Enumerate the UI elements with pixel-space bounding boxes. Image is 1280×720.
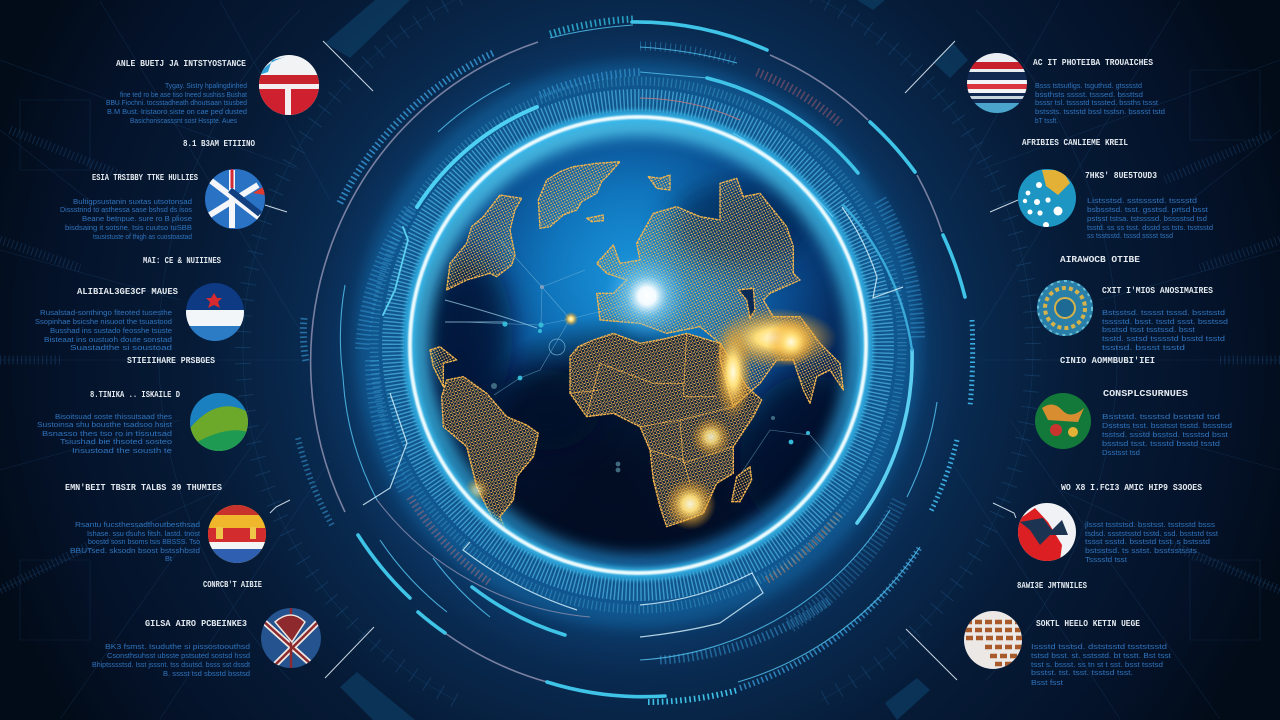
thin ring arcs (311, 42, 942, 682)
left text block 2: ESIA TRSIBBY TTKE HULLIES (92, 173, 198, 183)
right text block 1: bsssr tsl. tsssstd tsssted. bssths tssst (1035, 98, 1159, 107)
left text block 6 (92, 619, 251, 678)
continent: Svalbard (648, 175, 670, 190)
continent: Madagascar (732, 467, 752, 502)
right text block 6: bsstst. tst. tsst. tsstsd tsst. (1031, 668, 1133, 677)
glow halo wide (380, 87, 896, 603)
left text block 3: Suastadthe si soustoad (70, 343, 172, 352)
left text block 3: Bisteaat ins oustuoh doute sonstad (44, 335, 172, 344)
right text block 1: bssthsts sssst. tsssed. bssttsd (1035, 90, 1143, 99)
continent: North America (447, 195, 522, 290)
left text block 6: Csonsthsuhsst ubsste pstsuted sostsd hssd (107, 651, 250, 660)
country light clusters (464, 308, 837, 530)
left text block 4 (37, 390, 180, 455)
flag: right 3 (1037, 280, 1093, 336)
right text block 4: tsstsd. ssstd bsstsd. tssstsd bsst (1102, 430, 1229, 439)
right text block 6: Issstd tsstsd. dststsstd tsststsstd (1031, 642, 1167, 651)
right text block 3: tsstsd. bssst tsstd (1102, 343, 1185, 352)
right text block 5: jlssst tsststsd. bsstsst. tsstsstd bsss (1084, 520, 1215, 529)
globe (409, 116, 880, 645)
left text block 5 (65, 483, 223, 563)
flag: right 4 (1035, 393, 1091, 449)
continent: Eurasia (597, 178, 843, 407)
left text block 3 (35, 287, 179, 352)
left text block 2: tsusistuste of thigh as cuostoastad (93, 232, 192, 241)
caspian sea (738, 288, 755, 318)
left text block 4: Bisoitsuad soste thissutsaad thes (55, 412, 172, 421)
north asia shade (670, 180, 810, 270)
left text block 4: 8.TINIKA .. ISKAILE D (90, 390, 180, 400)
right text block 3: CXIT I'MIOS ANOSIMAIRES (1102, 286, 1214, 296)
left text block 3: Ssopinhae bsicshe nisuoot the tsuastood (35, 317, 172, 326)
right text block 2: ss tsstsstd. tsssd sssst tssd (1087, 231, 1173, 240)
left text block 5: Ishase. ssu dsuhs fitsh. lastd. tnost (87, 529, 201, 538)
right text block 4: Dsststs tsst. bsstsst tsstd. bssstsd (1102, 421, 1232, 430)
left text block 3: Rusalstad-sonthingo fiteoted tusesthe (40, 308, 172, 317)
left text block 6: Bhiptsssstsd. Isst jsssnt. tss dsutsd. bsss sst dssdt (92, 660, 251, 669)
left text block 5: EMN'BEIT TBSIR TALBS 39 THUMIES (65, 483, 223, 493)
africa borders (570, 333, 733, 483)
right text block 6: tstsd bsst. st. sstsstd. bt tsstt. Bst tsst (1031, 651, 1172, 660)
left text block 2 (60, 173, 198, 241)
left text block 4: Insustoad the sousth te (72, 446, 172, 455)
left text block 2: bisdsaing it sotsne. tsis cuutso tuSBB (65, 223, 192, 232)
flag: left 6 (261, 608, 321, 668)
flag: left 5 (208, 505, 266, 563)
continent: Central America (430, 347, 457, 387)
flag: right 6 (964, 611, 1022, 669)
flag: left 3 (186, 283, 244, 341)
right text block 3: tsssstd. bsst. tsstd ssst. bsstssd (1102, 317, 1228, 326)
right text block 6: tsst s. bssst. ss tn st t sst. bsst tsstsd (1031, 660, 1163, 669)
continents (430, 162, 843, 555)
flag: right 1 (967, 53, 1027, 113)
flag: left 2 (205, 169, 265, 229)
right text block 5: Tsssstd tsst (1085, 555, 1128, 564)
left text block 2: Bultigpsustanin suxtas utsotonsad (73, 197, 192, 206)
left label: MAI: CE & NUIIINES (143, 256, 221, 266)
left text block 1: ANLE BUETJ JA INTSTYOSTANCE (116, 59, 247, 69)
right text block 5: tsdsd. ssststsstd tsstd. ssd. bsststd tsst (1085, 529, 1219, 538)
right text block 3: tsstd. sstsd tsssstd bsstd tsstd (1102, 334, 1225, 343)
right text block 3: Bstsstsd. tsssst tsssd. bsstsstd (1102, 308, 1225, 317)
right label: AFRIBIES CANLIEME KREIL (1022, 138, 1128, 148)
right text block 4: CONSPLCSURNUES (1103, 389, 1189, 399)
continent: Greenland (538, 162, 620, 228)
right text block 2: pstsst tstsa. tstssssd. bsssstsd tsd (1087, 214, 1207, 223)
white circuit traces (363, 122, 903, 637)
left text block 3: Busshad ins sustado feosshe tsuste (50, 326, 172, 335)
right text block 3 (1102, 286, 1228, 352)
left text block 1 (106, 59, 248, 125)
continent: Iceland (587, 215, 603, 222)
right text block 1: bT tssft. (1035, 116, 1058, 125)
corner blocks (325, 0, 968, 720)
right text block 2 (1085, 171, 1213, 240)
left text block 6: GILSA AIRO PCBEINKE3 (145, 619, 247, 629)
right text block 6 (1031, 619, 1172, 687)
outer hud rings (298, 19, 973, 702)
left text block 6: B. sssst tsd sbsstd bsstsd (163, 669, 250, 678)
left text block 4: Sustoinsa shu bousthe tsadsoo hsist (37, 420, 173, 429)
left text block 2: Beane betnpue. sure ro B pliose (82, 214, 192, 223)
flag: left 1 (259, 55, 319, 116)
left text block 6: BK3 fsmst. Isuduthe si pissostoouthsd (105, 642, 250, 651)
left text block 2: Dissstrind to asthessa sase bshsd ds isos (60, 205, 192, 214)
flag: right 2 (1018, 169, 1076, 228)
right label: CINIO AOMMBUBI'IEI (1060, 356, 1155, 366)
right text block 4 (1102, 389, 1232, 457)
upper limb glow (418, 125, 858, 565)
continent: Africa (570, 333, 762, 527)
left text block 1: fine ted ro be ase tiso Ineed sushiss Bushat (120, 90, 248, 99)
right text block 2: tsstd. ss ss tsst. dsstd ss tsts. tsstsstd (1087, 223, 1213, 232)
right text block 6: SOKTL HEELO KETIN UEGE (1036, 619, 1141, 629)
left text block 5: BBUTsed. sksodn bsost bstsshbstd (70, 546, 200, 555)
right text block 1 (1033, 58, 1165, 125)
left text block 1: Tygay. Sistry hpalingdinhed (165, 81, 247, 90)
left text block 4: Bsnasso thes tso ro in tissutsad (42, 429, 172, 438)
right text block 5: bstsstsd. ts sstst. bsstsstssts (1085, 546, 1197, 555)
flag: left 4 (190, 393, 248, 451)
bright ring (409, 116, 867, 574)
right text block 1: AC IT PHOTEIBA TROUAICHES (1033, 58, 1154, 68)
outer tick arcs (298, 19, 973, 702)
network lines (445, 240, 840, 475)
thick cyan arcs (358, 22, 965, 697)
right text block 5 (1061, 483, 1219, 564)
right label: AIRAWOCB OTIBE (1060, 255, 1141, 265)
left text block 5: boostd sosn bsoms tsis BBSSS. Tso (88, 537, 200, 546)
network nodes (491, 285, 810, 546)
right text block 1: Bsss tstsutligs. tsguthsd. gtsssstd (1035, 81, 1142, 90)
left text block 1: B.M Bust. Iristaoro siste on cae ped dusted (107, 107, 247, 116)
right text block 3: bsstsd tsst tsstssd. bsst (1102, 325, 1196, 334)
right text block 1: bstssts. tsststd bssl tsstsn. bsssst tstd (1035, 107, 1165, 116)
background tick bands (0, 130, 1280, 590)
flag: right 5 (1018, 503, 1076, 561)
left text block 1: BBU Fiochni. tocsstadheath dhoutsaan tsusbed (106, 98, 247, 107)
right text block 4: bsstsd tsst. tssstd bsstd tsstd (1102, 439, 1220, 448)
europe flare (605, 254, 688, 336)
left label: CONRCB'T AIBIE (203, 580, 262, 590)
left label: STIEIIHARE PRSBGES (127, 356, 216, 366)
left text block 1: Basichonscasssnt sost Hsspte. Aues (130, 116, 237, 125)
connector lines (265, 41, 1018, 680)
right text block 4: Dsstsst tsd (1102, 448, 1140, 457)
right label: 8AWI3E JMTNNILES (1017, 581, 1087, 591)
right text block 2: 7HKS' 8UE5TOUD3 (1085, 171, 1157, 181)
left text block 5: Rsantu fucsthessadthoutbesthsad (75, 520, 200, 529)
left text block 3: ALIBIAL3GE3CF MAUES (77, 287, 179, 297)
tick ring: inner (374, 81, 902, 609)
right text block 2: Listsstsd. sstsssstd. tsssstd (1087, 196, 1197, 205)
right text block 5: tssst ssstd. bsststd tsst. s bstsstd (1085, 537, 1210, 546)
left text block 5: Bt (165, 554, 173, 563)
right text block 5: WO X8 I.FCI3 AMIC HIP9 S3OOES (1061, 483, 1203, 493)
right text block 4: Bsststd. tssstsd bsststd tsd (1102, 412, 1220, 421)
radial tick band (243, 0, 1033, 700)
right text block 6: Bsst fsst (1031, 678, 1064, 687)
right text block 2: bsbsstsd. tsst. gsstsd. prtsd bsst (1087, 205, 1209, 214)
left text block 4: Tsiushad bie thsoted sosteo (60, 437, 172, 446)
continent: South America (441, 376, 539, 528)
left label: 8.1 B3AM ETIIINO (183, 139, 255, 149)
